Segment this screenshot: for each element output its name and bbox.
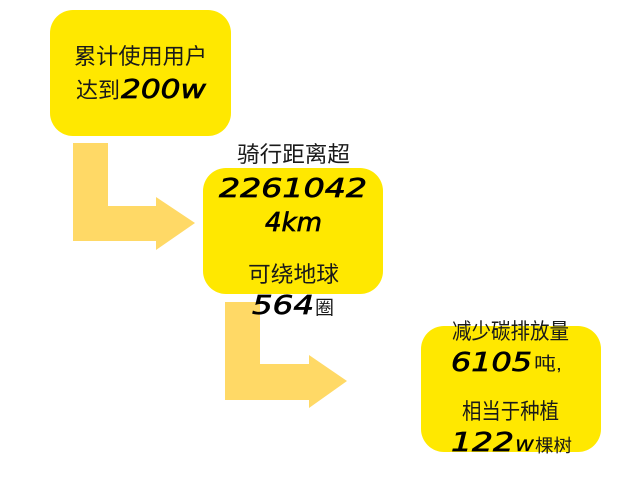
number: tons [451,348,562,378]
panel: cumulative users [50,10,231,136]
number: tons: 吨, [534,354,562,374]
panel: carbon reduction [421,319,601,458]
number: tons: 6105 [451,348,532,378]
number: laps: 圈 [315,298,334,319]
arrow: users to distance [73,143,195,250]
text: equivalent to planting: 相当于种植 [462,399,559,424]
text: around the earth: 可绕地球 [248,262,339,287]
number: laps [252,291,334,321]
text: cumulative users line 2 [76,75,207,105]
number: laps: 564 [252,291,314,321]
number: distance: 2261042 [219,174,367,204]
number: trees [451,428,572,458]
text: cumulative users line 2: 达到 [76,78,120,103]
number: trees: 棵树 [535,436,572,456]
text: carbon reduction heading: 减少碳排放量 [452,319,569,344]
number: distance unit: 4km [265,208,322,238]
arrow: distance to carbon [225,302,347,408]
number: trees: w [515,432,535,456]
heading: riding distance: 骑行距离超 [237,142,350,167]
text: cumulative users line 2: 200w [121,75,207,105]
number: trees: 122 [451,428,514,458]
text: cumulative users line 1: 累计使用用户 [74,44,207,69]
panel: riding distance [203,168,383,294]
